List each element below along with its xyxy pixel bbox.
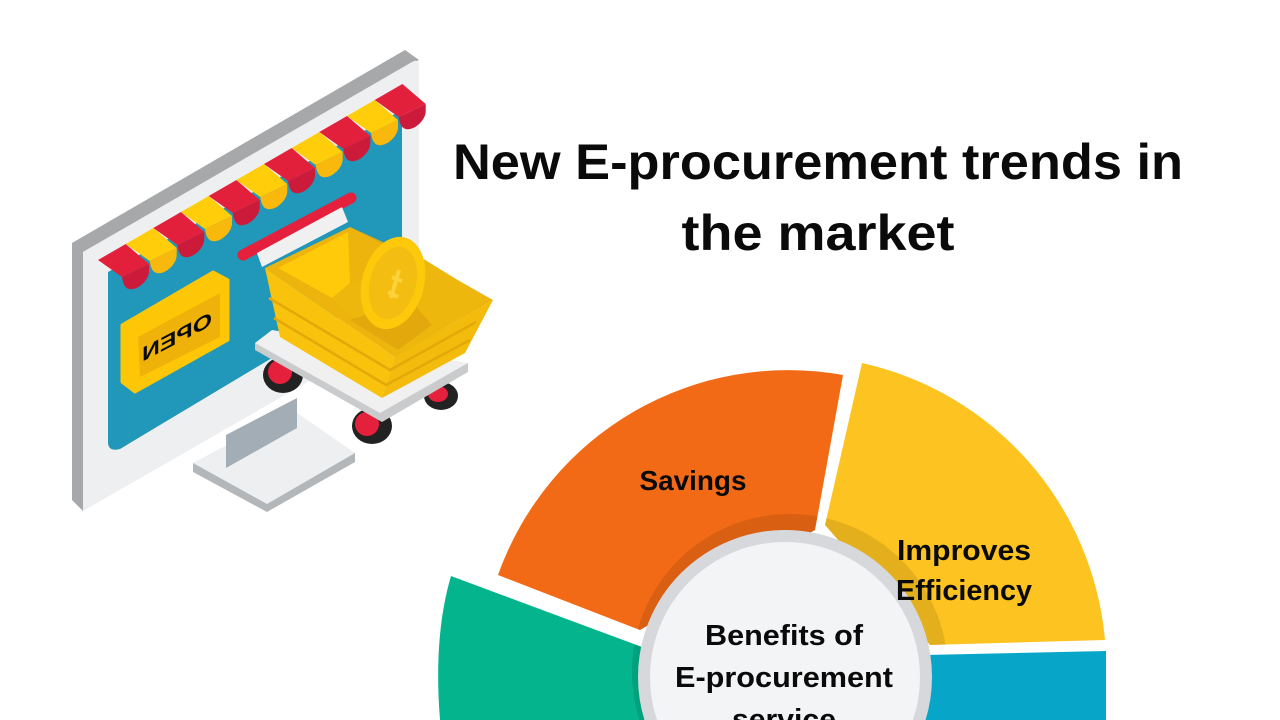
title: New E-procurement trends in: [453, 134, 1183, 190]
segment: improves efficiency: [825, 363, 1105, 645]
shopping cart: [243, 198, 493, 444]
label: improves efficiency: [896, 535, 1032, 607]
label: improves efficiency: Efficiency: [896, 575, 1032, 607]
awning: [98, 84, 426, 289]
centre circle: [644, 536, 926, 720]
open sign: OPEN: [142, 308, 212, 367]
open sign: [122, 272, 228, 392]
monitor stand: [193, 398, 355, 512]
coin: [351, 230, 435, 336]
title: the market: [682, 205, 955, 261]
label: centre text: Benefits of: [705, 620, 863, 652]
segment: green: [438, 576, 650, 720]
cart wheels: [263, 357, 458, 444]
cart handle: [243, 198, 351, 267]
monitor body: [72, 50, 419, 511]
label: centre text: [675, 620, 893, 720]
illustration: online shop monitor with cart: [72, 50, 493, 512]
segment: savings: [498, 370, 843, 630]
diagram: benefits of e-procurement: [438, 363, 1106, 720]
basket: [265, 227, 493, 398]
segment: blue: [925, 651, 1106, 720]
label: savings: Savings: [640, 465, 746, 496]
cart platform: [255, 330, 468, 422]
title: [453, 134, 1183, 261]
label: centre text: E-procurement: [675, 662, 893, 694]
inner shadow ring: [632, 514, 948, 720]
label: improves efficiency: Improves: [897, 535, 1031, 567]
